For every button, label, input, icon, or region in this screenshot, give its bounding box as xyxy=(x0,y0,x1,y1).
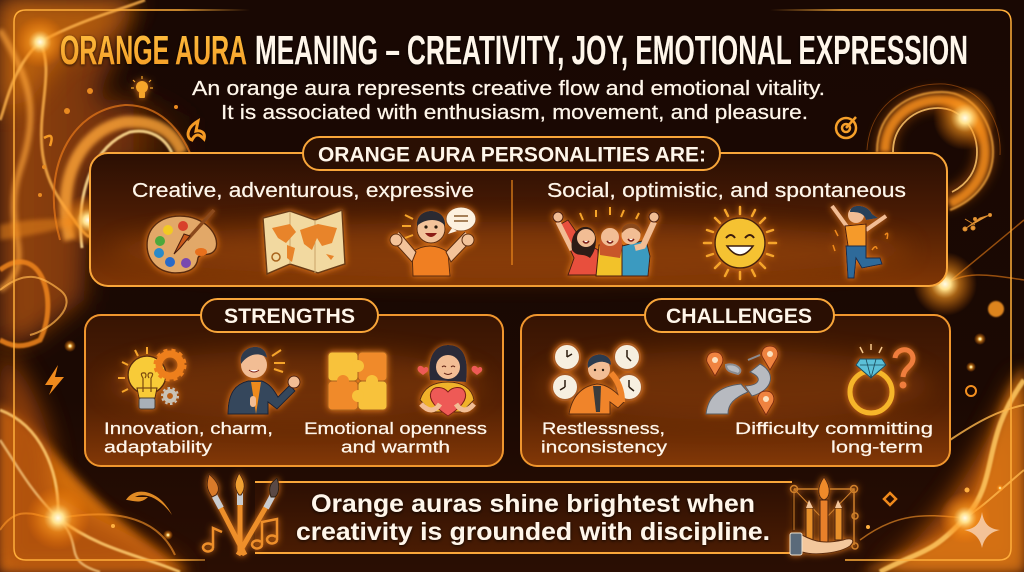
icon: crossed brushes and music notes xyxy=(203,473,279,555)
challenges right label xyxy=(735,419,933,456)
challenges right label: Difficulty committing xyxy=(735,419,933,438)
strengths heading pill: STRENGTHS xyxy=(224,305,355,328)
personalities heading pill: ORANGE AURA PERSONALITIES ARE: xyxy=(318,142,706,166)
strengths right label xyxy=(304,419,487,456)
panel: personalities xyxy=(90,137,947,286)
background flames: left side xyxy=(0,0,200,572)
strengths heading pill xyxy=(201,299,378,332)
subtitle text: It is associated with enthusiasm, movement, and pleasure. xyxy=(221,102,808,124)
icon: hand holding tools xyxy=(790,477,858,555)
decorative small icon: lightning bolt xyxy=(45,365,64,395)
icon: restless man with clocks xyxy=(552,344,642,414)
closing message text: Orange auras shine brightest when xyxy=(311,490,755,518)
icon: charming speaker xyxy=(228,347,300,414)
closing message text xyxy=(296,490,770,546)
personalities left label: Creative, adventurous, expressive xyxy=(132,179,474,202)
personalities right label: Social, optimistic, and spontaneous xyxy=(547,179,906,202)
challenges left label xyxy=(541,419,668,456)
icon: ring with question mark xyxy=(850,344,913,413)
panel: challenges xyxy=(521,299,950,466)
strengths right label: Emotional openness xyxy=(304,419,487,438)
decorative small icon: target xyxy=(836,117,856,138)
decorative small icon: diamond sparkle xyxy=(884,493,896,505)
icon: light bulb and gears xyxy=(118,347,185,409)
icon: world map xyxy=(263,210,345,274)
icon: woman hugging heart xyxy=(418,345,482,416)
decorative small icon: squiggle xyxy=(188,121,204,140)
panel: closing message band xyxy=(203,473,858,555)
icon: jumping person xyxy=(832,206,888,278)
icon: paint palette xyxy=(147,210,217,273)
icon: smiling sun xyxy=(704,207,776,279)
strengths right label: and warmth xyxy=(341,438,450,456)
strengths left label xyxy=(104,419,273,456)
subtitle text: An orange aura represents creative flow and emotional vitality. xyxy=(192,78,825,100)
background swirl: upper right xyxy=(867,84,1000,210)
challenges left label: Restlessness, xyxy=(542,419,665,438)
closing message text: creativity is grounded with discipline. xyxy=(296,518,770,546)
subtitle text xyxy=(192,78,825,124)
personalities heading pill xyxy=(303,137,720,170)
decorative small icon: light bulb xyxy=(131,76,153,98)
challenges right label: long-term xyxy=(831,438,923,456)
decorative small icon: constellation xyxy=(963,214,992,231)
icon: broken road with pins xyxy=(706,346,778,415)
background flames: right side xyxy=(860,220,1024,572)
decorative small icon: leaf swirl xyxy=(44,136,52,146)
challenges heading pill: CHALLENGES xyxy=(666,305,812,328)
strengths left label: Innovation, charm, xyxy=(104,419,273,438)
panel: strengths xyxy=(85,299,503,466)
icon: expressive person with speech bubble xyxy=(390,207,476,276)
challenges left label: inconsistency xyxy=(541,438,668,456)
title: ORANGE AURA xyxy=(60,27,247,73)
icon: group of friends xyxy=(553,207,659,276)
challenges heading pill xyxy=(645,299,834,332)
strengths left label: adaptability xyxy=(104,438,213,456)
icon: puzzle pieces xyxy=(328,352,387,410)
decorative sparkle star xyxy=(964,512,1000,548)
decorative small icon: flame crescent xyxy=(126,492,172,515)
